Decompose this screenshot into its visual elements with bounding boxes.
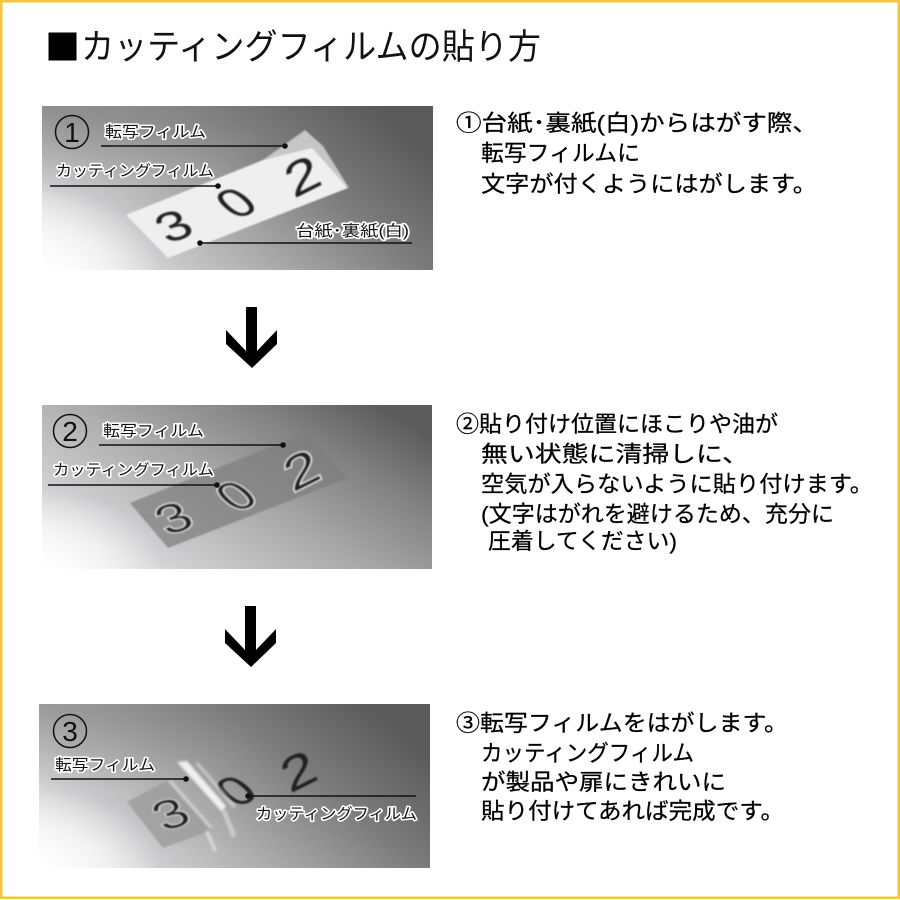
digits 302 xyxy=(142,739,325,840)
step 3 description: カッティングフィルム xyxy=(481,741,694,766)
step 3 description: が製品や扉にきれいに xyxy=(481,770,726,795)
arrow 2 xyxy=(225,606,276,667)
label: transfer film xyxy=(99,422,286,448)
applied film xyxy=(130,433,348,548)
digits 302: 0 xyxy=(203,767,269,815)
step 2 description: 空気が入らないように貼り付けます。 xyxy=(481,472,873,497)
label: cutting film xyxy=(48,461,220,488)
remaining film xyxy=(127,780,213,848)
step number xyxy=(56,116,88,148)
step 1 description: 転写フィルムに xyxy=(481,141,640,166)
step 1 description xyxy=(456,111,818,197)
digits 302 on paper: 3 xyxy=(145,200,203,252)
digits 302 on paper: 2 xyxy=(276,144,329,208)
label: transfer film: 転写フィルム xyxy=(103,422,204,440)
digits 302 on film: 0 xyxy=(203,472,269,520)
label: transfer film: 転写フィルム xyxy=(105,123,206,141)
step 2 description: 圧着してください) xyxy=(488,529,677,554)
digits 302: 3 xyxy=(142,788,200,840)
panel: step 2 photo xyxy=(42,405,432,569)
step number xyxy=(54,414,86,448)
step number: 3 xyxy=(62,716,78,747)
step 2 description xyxy=(456,412,873,554)
arrow 1 xyxy=(226,307,277,368)
label: cutting film: カッティングフィルム xyxy=(56,162,214,180)
panel: step 3 photo xyxy=(39,704,430,868)
digits 302 on paper: 0 xyxy=(203,179,269,227)
label: cutting film xyxy=(245,793,417,823)
step 3 description: ③転写フィルムをはがします。 xyxy=(456,711,788,736)
digits 302 on film: 3 xyxy=(145,492,203,544)
digits 302 on paper xyxy=(145,144,329,252)
digits 302 on film xyxy=(145,438,328,544)
label: cutting film: カッティングフィルム xyxy=(53,461,214,479)
step 3 description: 貼り付けてあれば完成です。 xyxy=(481,799,784,824)
label: transfer film: 転写フィルム xyxy=(55,756,155,774)
title xyxy=(45,20,541,71)
film fold highlight xyxy=(168,761,236,852)
step number: 1 xyxy=(64,117,80,148)
step number: 2 xyxy=(62,416,78,447)
step 1 description: 文字が付くようにはがします。 xyxy=(481,172,817,197)
label: transfer film xyxy=(51,756,189,782)
digits 302: 2 xyxy=(272,739,325,803)
step 2 description: (文字はがれを避けるため、充分に xyxy=(481,502,834,527)
label: backing paper: 台紙･裏紙(白) xyxy=(296,222,409,240)
label: cutting film: カッティングフィルム xyxy=(256,805,417,823)
step 3 description xyxy=(456,711,788,824)
step 1 description: ①台紙･裏紙(白)からはがす際、 xyxy=(456,111,818,136)
step 2 description: 無い状態に清掃しに、 xyxy=(481,442,749,467)
label: cutting film xyxy=(50,162,221,189)
peeled transfer film xyxy=(263,130,349,188)
backing paper xyxy=(126,148,348,258)
step 2 description: ②貼り付け位置にほこりや油が xyxy=(456,412,778,437)
label: transfer film xyxy=(101,123,288,149)
title: ■ xyxy=(45,20,80,71)
title: カッティングフィルムの貼り方 xyxy=(81,28,541,67)
digits 302 on film: 2 xyxy=(275,438,328,502)
panel: step 1 photo xyxy=(42,106,433,270)
label: backing paper xyxy=(197,222,412,246)
step number xyxy=(54,714,86,748)
